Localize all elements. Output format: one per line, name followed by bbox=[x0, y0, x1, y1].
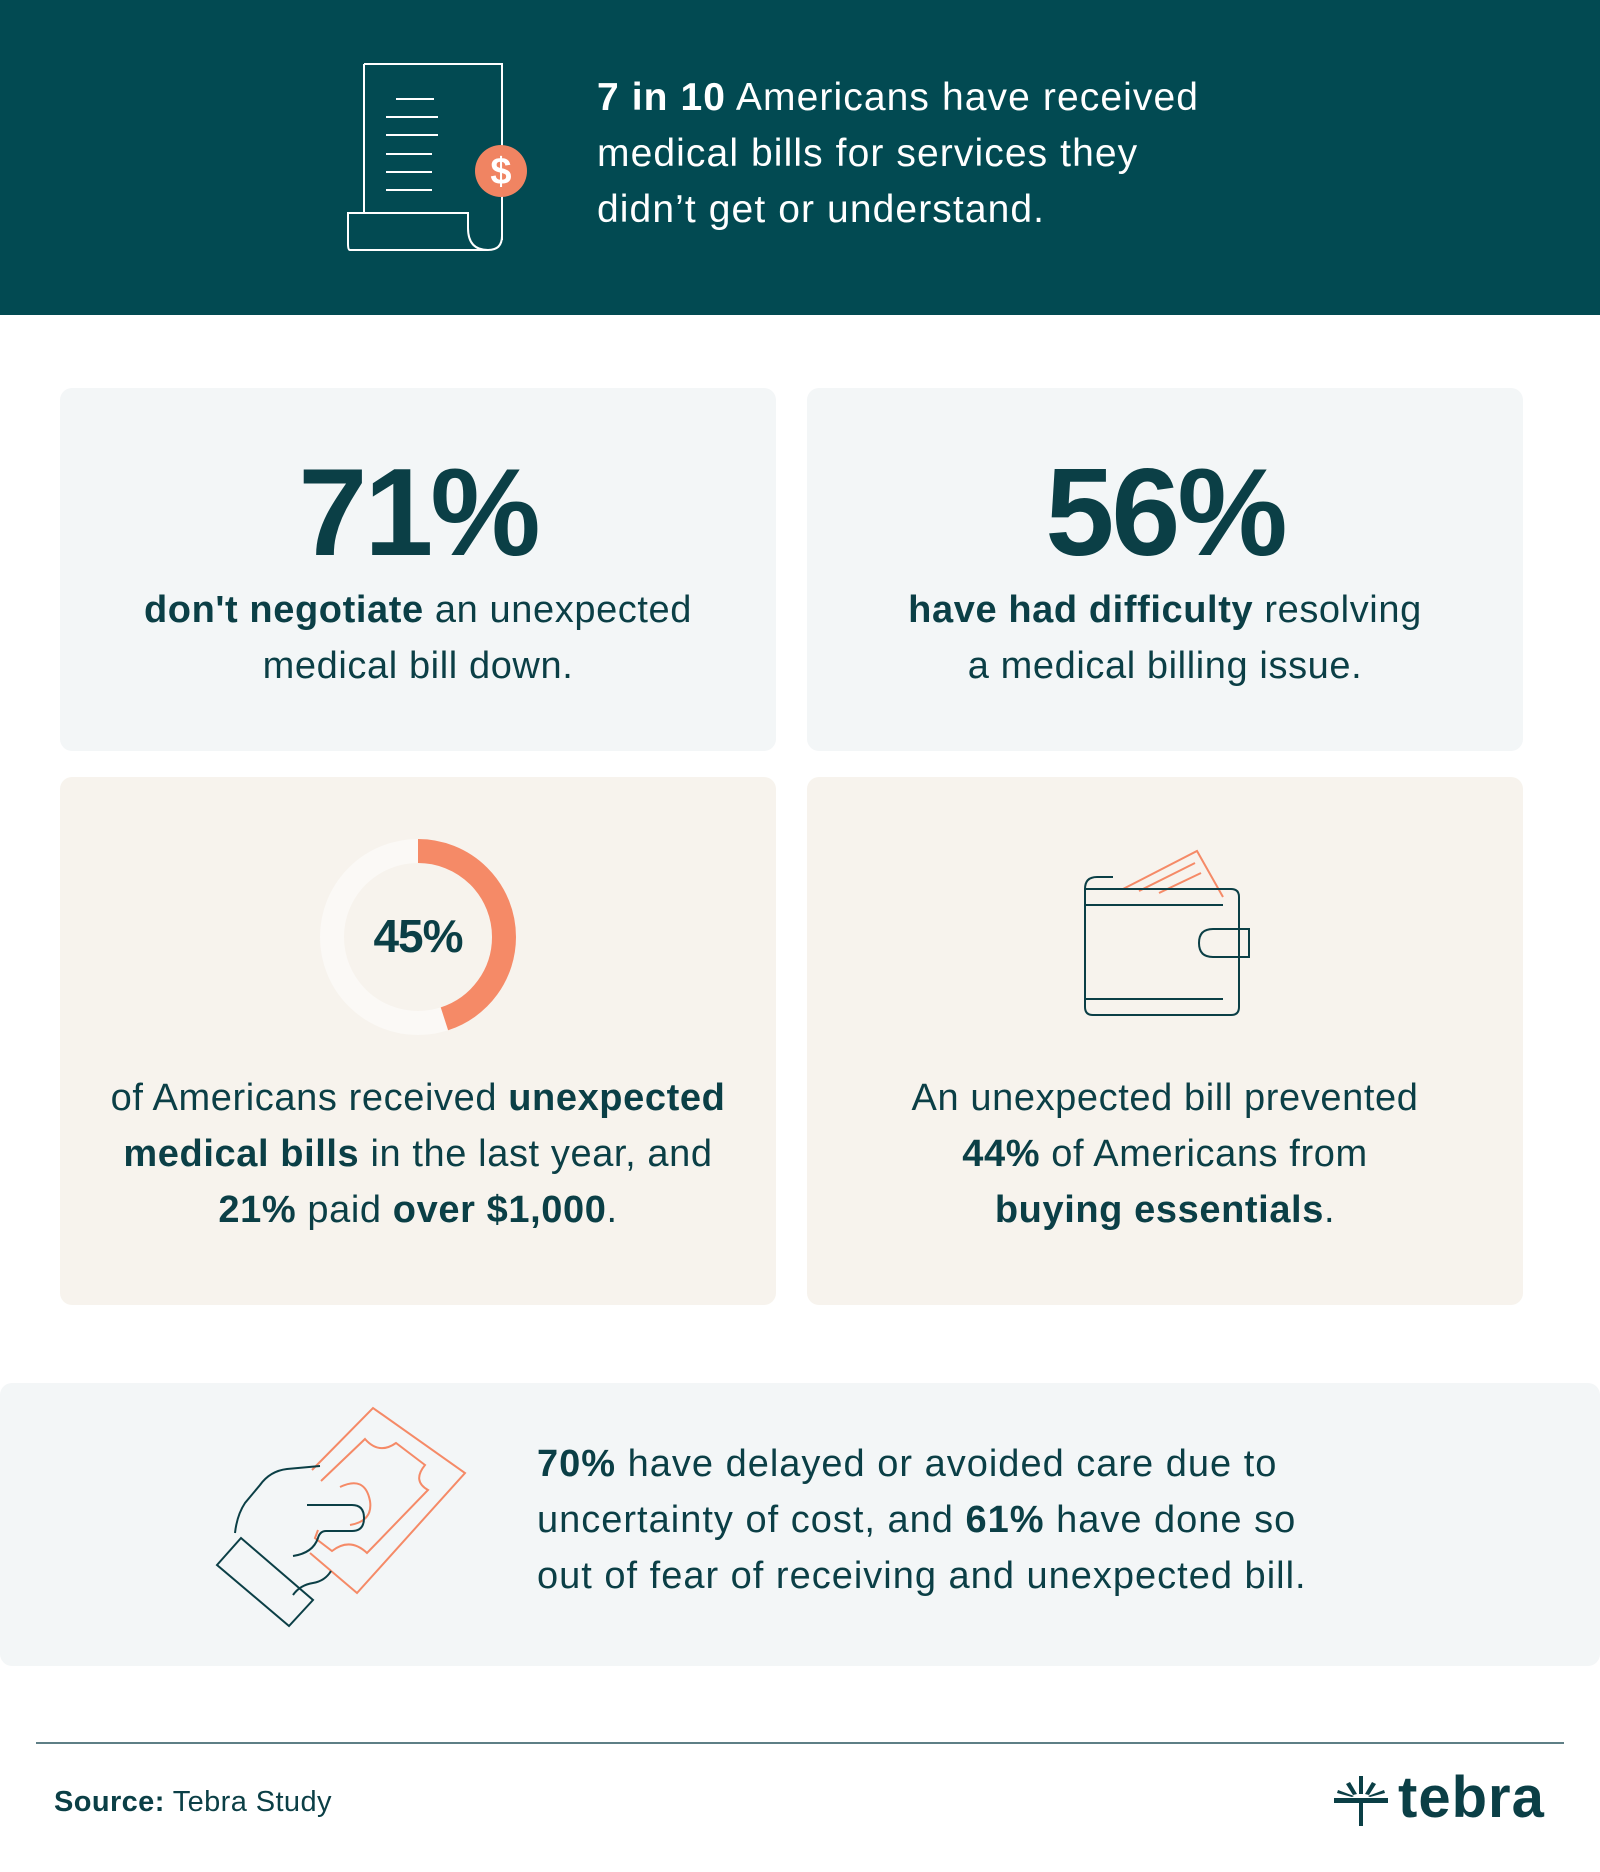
text block: 70% have delayed or avoided care due to bbox=[537, 1443, 1277, 1485]
text block bbox=[537, 1443, 1307, 1597]
text block: buying essentials. bbox=[995, 1189, 1335, 1231]
text block: of Americans received unexpected bbox=[111, 1077, 725, 1119]
donut chart 45% bbox=[320, 839, 516, 1035]
panel: 45% bbox=[60, 777, 776, 1305]
header text: medical bills for services they bbox=[597, 132, 1138, 175]
panel: 44% bbox=[807, 777, 1523, 1305]
text block: don't negotiate an unexpected bbox=[144, 589, 692, 631]
panel: 71% bbox=[60, 388, 776, 751]
text block: have had difficulty resolving bbox=[908, 589, 1422, 631]
text block bbox=[908, 589, 1422, 687]
source text: Source: Tebra Study bbox=[54, 1786, 332, 1818]
big number 56%: 56% bbox=[1045, 444, 1285, 582]
text block: 21% paid over $1,000. bbox=[218, 1189, 618, 1231]
text block: An unexpected bill prevented bbox=[912, 1077, 1418, 1119]
donut chart 45%: 45% bbox=[373, 910, 463, 962]
logo: tebra bbox=[1334, 1765, 1545, 1830]
text block bbox=[144, 589, 692, 687]
icon: hand with money bbox=[216, 1406, 466, 1628]
icon: receipt bbox=[347, 63, 527, 251]
text block: medical bill down. bbox=[263, 645, 573, 687]
header text bbox=[597, 76, 1199, 231]
text block bbox=[111, 1077, 725, 1231]
panel: 70% delayed care bbox=[0, 1383, 1600, 1666]
text block: a medical billing issue. bbox=[968, 645, 1362, 687]
header banner bbox=[0, 0, 1600, 315]
text block: uncertainty of cost, and 61% have done so bbox=[537, 1499, 1296, 1541]
icon: wallet bbox=[1084, 850, 1250, 1016]
text block: 44% of Americans from bbox=[962, 1133, 1368, 1175]
logo: tebra: tebra bbox=[1398, 1765, 1545, 1830]
header text: 7 in 10 Americans have received bbox=[597, 76, 1199, 119]
header text: didn’t get or understand. bbox=[597, 188, 1045, 231]
text block: out of fear of receiving and unexpected bill. bbox=[537, 1555, 1307, 1597]
text block bbox=[912, 1077, 1418, 1231]
big number 71%: 71% bbox=[298, 444, 538, 582]
icon: receipt: $ bbox=[490, 151, 512, 193]
panel: 56% bbox=[807, 388, 1523, 751]
text block: medical bills in the last year, and bbox=[123, 1133, 713, 1175]
